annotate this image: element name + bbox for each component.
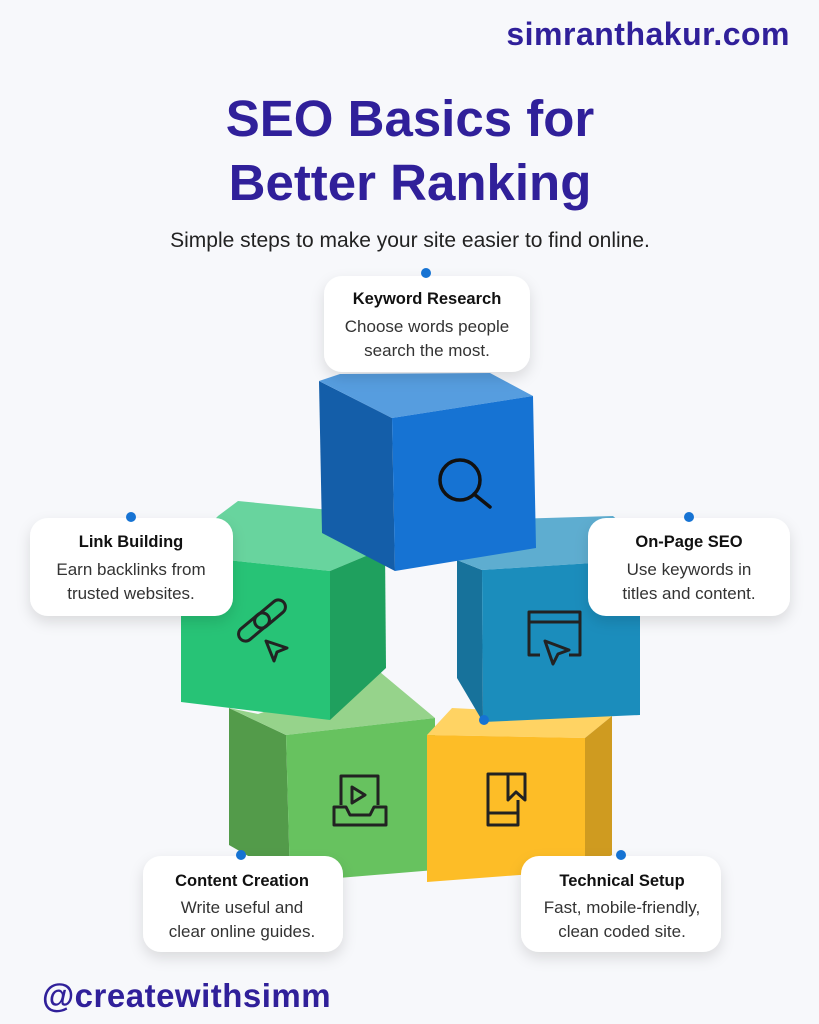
- card: content creation: clear online guides.: [169, 922, 315, 941]
- cube: keyword research: [319, 373, 536, 571]
- cube: link building: [181, 501, 386, 720]
- card: keyword research: Keyword Research: [353, 290, 501, 308]
- card: link building: [30, 512, 233, 616]
- card: content creation: [143, 850, 343, 952]
- card: content creation: Write useful and: [181, 898, 303, 917]
- domain text: simranthakur.com: [506, 16, 790, 52]
- icon: browser cursor: [529, 612, 580, 664]
- cube: on-page seo: [457, 516, 640, 722]
- subtitle: Simple steps to make your site easier to find online.: [170, 229, 650, 252]
- card: on-page seo: [588, 512, 790, 616]
- icon: book: [488, 774, 525, 825]
- cube: content creation: [229, 672, 435, 882]
- icon: video: [334, 776, 386, 825]
- card: link building: Link Building: [79, 533, 183, 551]
- icon: magnifier: [440, 460, 490, 507]
- card: content creation: Content Creation: [175, 872, 309, 890]
- card: technical setup: Technical Setup: [559, 872, 685, 890]
- card: link building: trusted websites.: [67, 584, 195, 603]
- card: technical setup: [521, 850, 721, 952]
- card: technical setup: clean coded site.: [558, 922, 686, 941]
- card: link building: Earn backlinks from: [56, 560, 206, 579]
- card: on-page seo: titles and content.: [622, 584, 756, 603]
- title: Better Ranking: [229, 154, 591, 211]
- cube: technical setup: [427, 708, 612, 882]
- card: on-page seo: On-Page SEO: [635, 533, 743, 551]
- card: technical setup: Fast, mobile-friendly,: [544, 898, 700, 917]
- handle: @createwithsimm: [42, 977, 331, 1014]
- card: keyword research: search the most.: [364, 341, 490, 360]
- icon: link cursor: [236, 597, 288, 661]
- title: SEO Basics for: [226, 90, 594, 147]
- dot: cube join: [479, 715, 489, 725]
- card: on-page seo: Use keywords in: [627, 560, 751, 579]
- card: keyword research: Choose words people: [345, 317, 509, 336]
- card: keyword research: [324, 268, 530, 372]
- title: [226, 90, 594, 211]
